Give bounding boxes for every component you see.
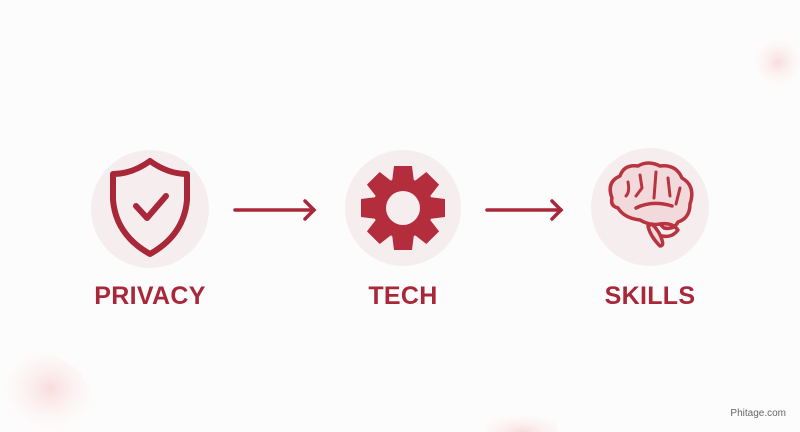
label: tech: TECH (368, 282, 438, 310)
icon: skills brain (591, 148, 709, 266)
arrow 1 (235, 201, 314, 219)
label: skills: SKILLS (605, 282, 695, 310)
icon: privacy shield (91, 150, 209, 268)
icon: tech gear (345, 150, 461, 266)
label: privacy: PRIVACY (94, 282, 206, 310)
arrow 2 (487, 201, 561, 219)
watermark: Phitage.com (730, 408, 786, 419)
